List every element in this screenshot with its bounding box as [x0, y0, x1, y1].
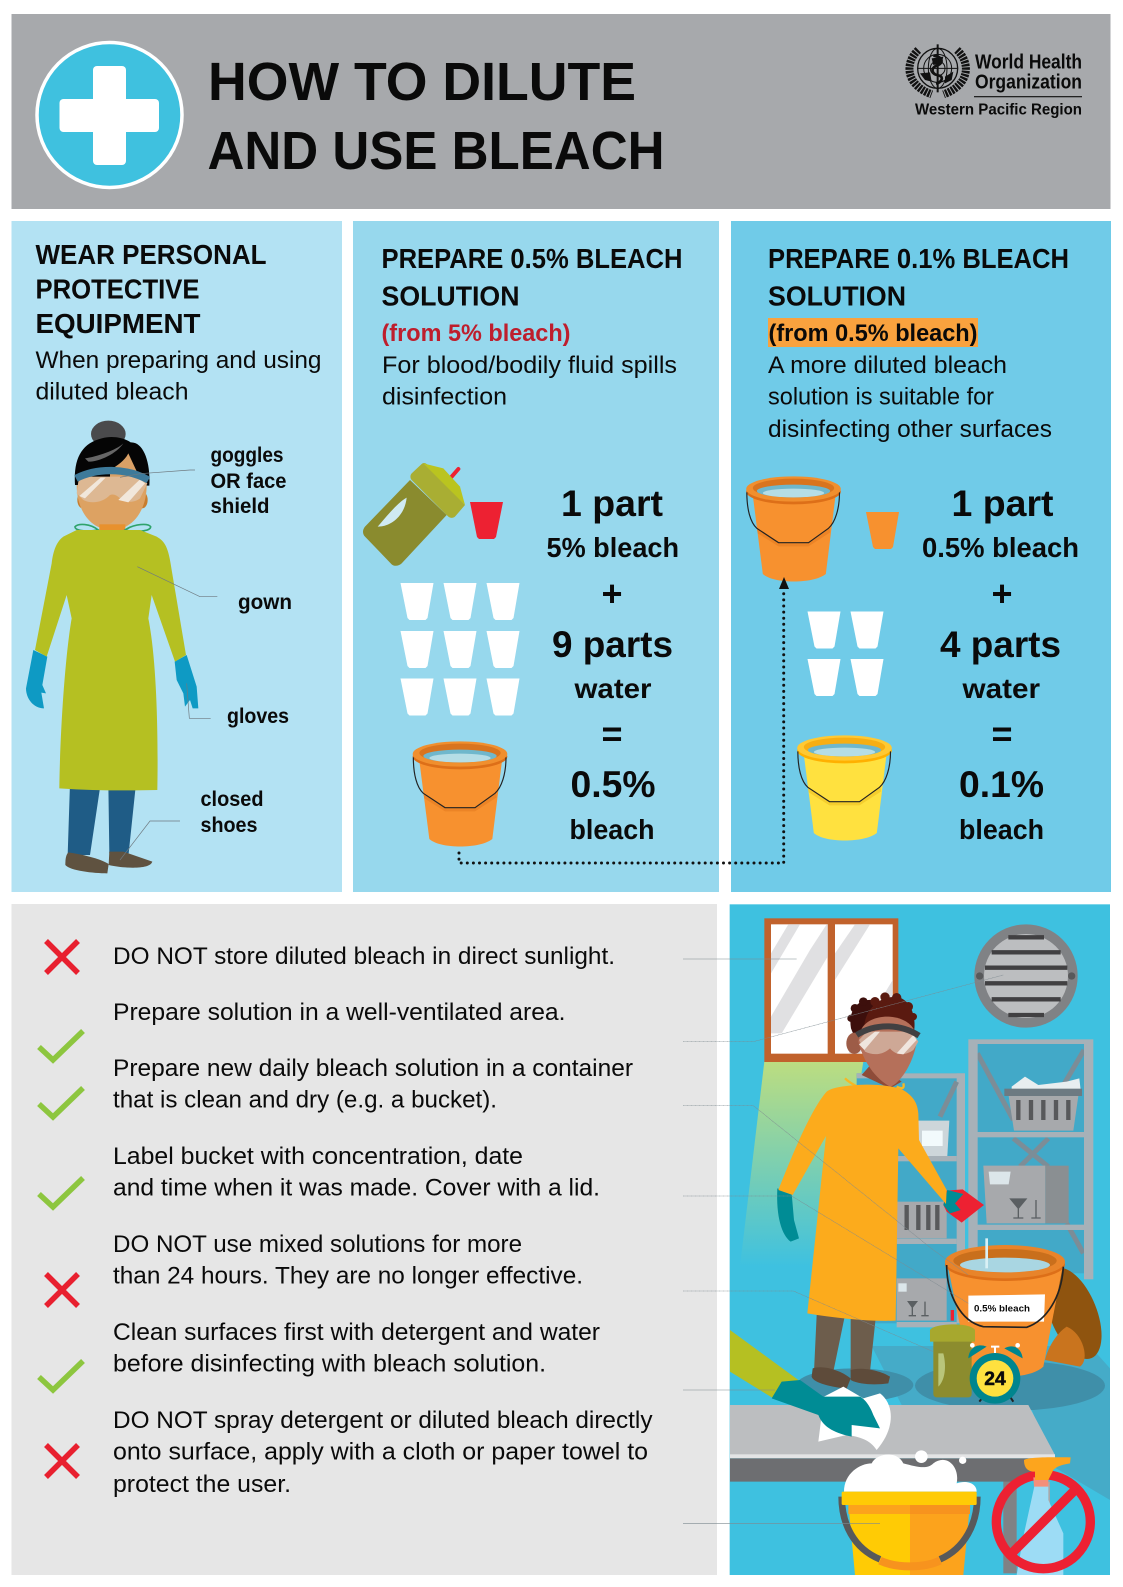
- plus sign: +: [601, 573, 623, 614]
- panel subtitle: A more diluted bleach: [768, 352, 1007, 379]
- result: 0.5% bleach: [570, 764, 656, 845]
- no spray bottle sign: [996, 1457, 1090, 1575]
- rule: label bucket: [113, 1143, 600, 1202]
- panel: prepare 0.5% bleach solution: [353, 221, 719, 892]
- label: goggles or face shield: shield: [210, 494, 270, 518]
- panel heading: WEAR PERSONAL: [36, 239, 266, 270]
- bucket of soapy water: [842, 1450, 977, 1575]
- panel: wear personal protective equipment: [12, 221, 342, 892]
- alarm clock 24 hours: 24: [984, 1369, 1006, 1390]
- calculation: 9 parts water: [552, 624, 673, 704]
- title: HOW TO DILUTE: [208, 52, 636, 112]
- vent: [974, 924, 1078, 1028]
- result: 0.5% bleach: 0.5%: [570, 764, 656, 805]
- panel heading: PREPARE 0.5% BLEACH: [382, 243, 682, 274]
- panel subtitle: When preparing and using: [36, 347, 322, 374]
- panel subtitle: diluted bleach: [36, 378, 188, 406]
- rule: 24 hours: than 24 hours. They are no longer effective.: [113, 1262, 583, 1290]
- calculation: 4 parts water: [940, 624, 1061, 704]
- title: AND USE BLEACH: [208, 121, 664, 181]
- panel heading: [768, 243, 1069, 312]
- icon: bleach bottle pouring: [363, 463, 465, 566]
- icon: orange measuring cup: [866, 512, 899, 549]
- calculation: 9 parts water: water: [573, 673, 652, 704]
- calculation: 1 part 5% bleach: 1 part: [561, 483, 663, 524]
- panel heading: [36, 239, 266, 339]
- result: 0.1% bleach: bleach: [959, 814, 1044, 845]
- panel: prepare 0.1% bleach solution: [731, 221, 1111, 892]
- header banner: [12, 14, 1110, 209]
- source note: from 5% bleach: (from 5% bleach): [382, 320, 570, 347]
- calculation: 1 part 5% bleach: 5% bleach: [546, 532, 679, 563]
- rule: do not spray: DO NOT spray detergent or diluted bleach directly: [113, 1407, 652, 1434]
- panel subtitle: [36, 347, 322, 406]
- calculation: 9 parts water: 9 parts: [552, 624, 673, 665]
- WHO logo: Western Pacific Region: [915, 102, 1082, 118]
- icon: check: [39, 1361, 83, 1390]
- panel subtitle: For blood/bodily fluid spills: [382, 352, 677, 379]
- rule: direct sunlight: DO NOT store diluted bleach in direct sunlight.: [113, 943, 615, 970]
- WHO logo: [909, 44, 1082, 119]
- rule: do not spray: onto surface, apply with a cloth or paper towel to: [113, 1438, 648, 1466]
- icon: four water cups: [808, 612, 884, 696]
- icon: cross: [46, 1445, 78, 1477]
- label: gown: gown: [238, 590, 292, 614]
- label: gloves: gloves: [227, 704, 289, 728]
- label: goggles or face shield: [210, 443, 287, 518]
- result: 0.1% bleach: [959, 764, 1044, 845]
- rule: clean dry container: Prepare new daily bleach solution in a container: [113, 1055, 633, 1082]
- alarm clock 24 hours: [968, 1343, 1023, 1404]
- rule: 24 hours: DO NOT use mixed solutions for more: [113, 1231, 522, 1258]
- label: closed shoes: [200, 787, 264, 837]
- arm wiping with cloth: [730, 1330, 891, 1450]
- panel heading: PREPARE 0.1% BLEACH: [768, 243, 1069, 274]
- calculation: 4 parts water: 4 parts: [940, 624, 1061, 665]
- icon: check: [39, 1178, 83, 1207]
- shelves: [857, 1039, 1093, 1327]
- panel heading: SOLUTION: [768, 280, 906, 312]
- result: 0.1% bleach: 0.1%: [959, 764, 1044, 805]
- figure: person in protective equipment: [26, 421, 217, 873]
- panel subtitle: disinfection: [382, 384, 507, 410]
- panel subtitle: solution is suitable for: [768, 384, 994, 410]
- floor: [872, 1346, 1110, 1500]
- calculation: 1 part 0.5% bleach: 1 part: [952, 483, 1054, 524]
- icon: cross: [46, 1274, 78, 1306]
- label: goggles or face shield: goggles: [210, 443, 284, 467]
- illustration: room scene: [683, 904, 1113, 1575]
- plus sign: +: [991, 573, 1013, 614]
- window: [740, 918, 898, 1267]
- panel: do and do not list: [12, 904, 717, 1575]
- bleach bottle: [930, 1310, 975, 1397]
- equals sign: =: [601, 713, 623, 754]
- calculation: 1 part 0.5% bleach: 0.5% bleach: [922, 532, 1079, 563]
- table: [730, 1405, 1055, 1573]
- calculation: 1 part 5% bleach: [546, 483, 679, 563]
- equals sign: =: [991, 713, 1013, 754]
- icon: yellow bucket 0.1%: [797, 735, 892, 840]
- panel heading: [382, 243, 682, 312]
- person with goggles and gown: [777, 992, 984, 1389]
- icon: red measuring cup: [470, 502, 503, 539]
- WHO logo: Organization: [975, 70, 1082, 94]
- icon: check: [39, 1088, 83, 1117]
- rule: clean dry container: [113, 1055, 633, 1114]
- panel subtitle: disinfecting other surfaces: [768, 416, 1052, 443]
- rule: label bucket: and time when it was made. Cover with a lid.: [113, 1174, 600, 1202]
- icon: medical cross: [37, 42, 182, 188]
- icon: check: [39, 1031, 83, 1060]
- orange bucket with label: [945, 1238, 1085, 1377]
- title: [208, 52, 664, 181]
- icon: cross: [46, 941, 78, 973]
- label: goggles or face shield: OR face: [210, 469, 287, 493]
- rule: clean surfaces: [113, 1319, 600, 1378]
- result: 0.5% bleach: bleach: [570, 814, 654, 845]
- panel subtitle: [768, 352, 1052, 443]
- rule: clean surfaces: Clean surfaces first with detergent and water: [113, 1319, 600, 1346]
- icon: nine water cups: [400, 583, 520, 716]
- WHO logo: World Health: [975, 50, 1082, 74]
- calculation: 4 parts water: water: [961, 673, 1040, 704]
- arrow: dotted line from 0.5% bucket to source bucket: [459, 577, 789, 863]
- floor shadows: [797, 1361, 1105, 1411]
- rule: 24 hours: [113, 1231, 583, 1290]
- source note: from 0.5% bleach: (from 0.5% bleach): [768, 320, 978, 347]
- panel subtitle: [382, 352, 677, 410]
- icon: orange bucket 0.5%: [413, 741, 507, 846]
- rule: do not spray: [113, 1407, 652, 1498]
- rule: do not spray: protect the user.: [113, 1471, 291, 1498]
- label: closed shoes: shoes: [200, 813, 258, 837]
- calculation: 1 part 0.5% bleach: [922, 483, 1079, 563]
- rule: clean dry container: that is clean and dry (e.g. a bucket).: [113, 1086, 497, 1114]
- panel heading: SOLUTION: [382, 280, 520, 312]
- bucket lid: [1034, 1260, 1113, 1367]
- rule: ventilated area: Prepare solution in a well-ventilated area.: [113, 999, 566, 1026]
- rule: label bucket: Label bucket with concentration, date: [113, 1143, 523, 1170]
- bucket label text: 0.5% bleach: [974, 1303, 1030, 1313]
- leader lines: [683, 959, 1003, 1523]
- panel heading: PROTECTIVE: [36, 274, 200, 304]
- label: closed shoes: closed: [200, 787, 264, 811]
- panel heading: EQUIPMENT: [36, 308, 200, 339]
- icon: orange bucket source: [746, 476, 841, 581]
- rule: clean surfaces: before disinfecting with bleach solution.: [113, 1350, 546, 1378]
